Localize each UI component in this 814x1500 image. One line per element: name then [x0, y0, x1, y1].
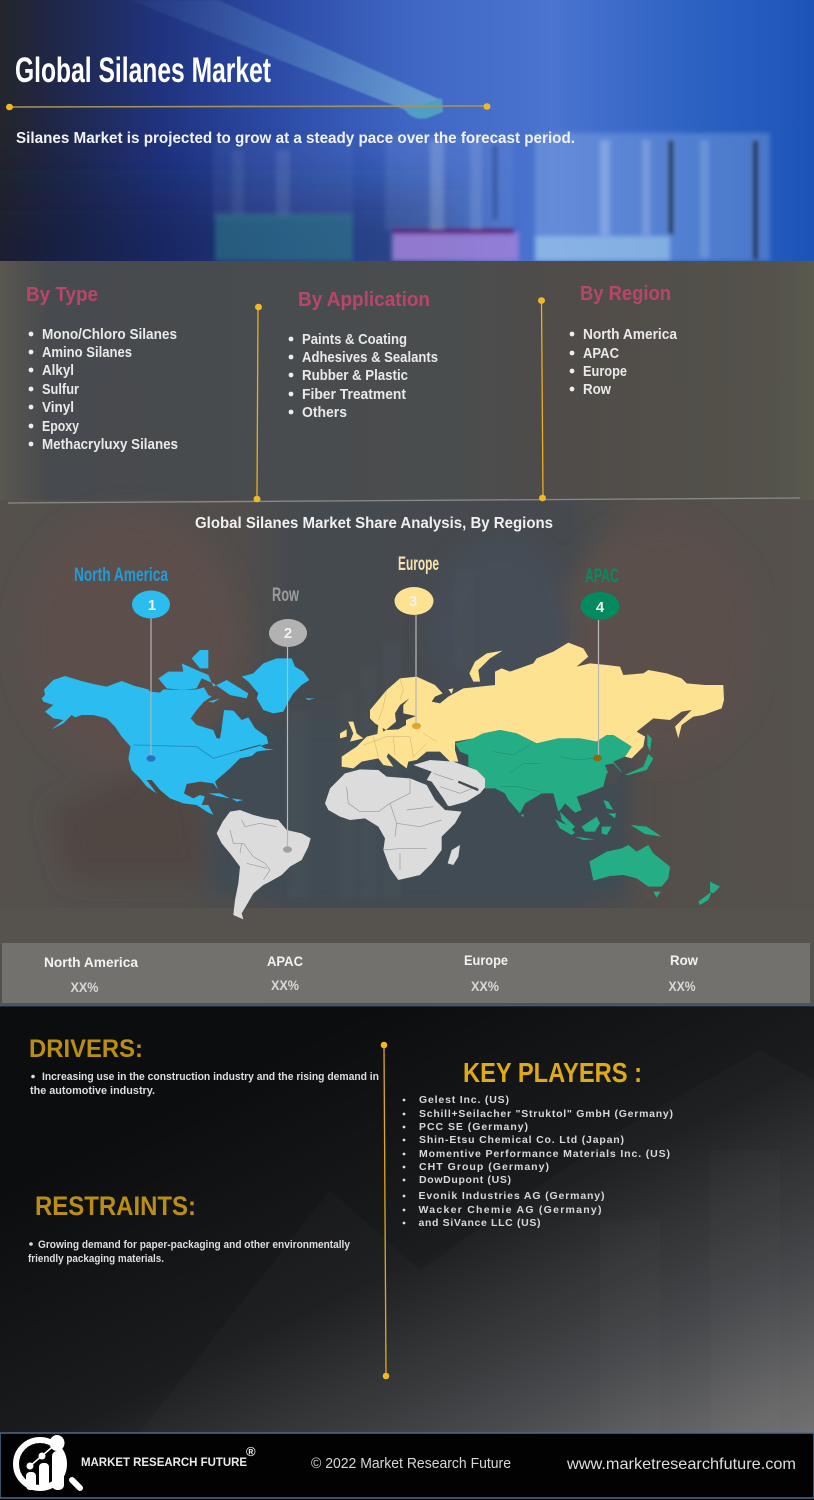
website: www.marketresearchfuture.com — [566, 1456, 796, 1473]
divider: left — [254, 304, 262, 502]
key players: PCC SE (Germany) — [419, 1121, 528, 1133]
restraints: RESTRAINTS: — [35, 1191, 196, 1221]
drivers: Increasing use in the construction industry and the rising demand in — [42, 1071, 379, 1083]
subtitle: Silanes Market is projected to grow at a steady pace over the forecast period. — [16, 130, 575, 147]
europe and russia — [340, 643, 724, 768]
decorative gray rule — [8, 498, 800, 503]
panel: drivers restraints key players — [0, 1007, 814, 1433]
registered mark: ® — [246, 1444, 256, 1459]
restraints: friendly packaging materials. — [28, 1253, 164, 1265]
key players: KEY PLAYERS : — [463, 1057, 642, 1088]
drivers: DRIVERS: — [29, 1035, 143, 1063]
table: regional share: XX% — [668, 978, 696, 994]
pin: europe — [394, 554, 439, 729]
list: types: Amino Silanes — [42, 345, 132, 361]
map: eurasia africa oceania — [325, 643, 724, 905]
restraints: Growing demand for paper-packaging and other environmentally — [38, 1239, 351, 1251]
south america — [217, 810, 311, 919]
copyright: © 2022 Market Research Future — [311, 1456, 511, 1472]
table: regional share: Europe — [464, 952, 508, 968]
yellow sea — [605, 763, 622, 785]
list: applications — [289, 332, 438, 421]
list: applications: Paints & Coating — [302, 332, 407, 348]
asia — [455, 730, 720, 905]
key players: Schill+Seilacher "Struktol" GmbH (Germany) — [419, 1108, 673, 1120]
list: types: Sulfur — [42, 382, 79, 398]
header banner — [0, 0, 814, 310]
divider: lower — [381, 1042, 389, 1379]
baltic sea — [386, 698, 416, 730]
list: applications: Fiber Treatment — [302, 387, 406, 403]
list: regions: Europe — [583, 364, 627, 380]
heading: by region: By Region — [580, 283, 671, 305]
restraints — [28, 1191, 351, 1265]
heading: by type: By Type — [26, 284, 98, 306]
brand name: MARKET RESEARCH FUTURE — [81, 1457, 247, 1469]
list: types: Epoxy — [42, 419, 79, 435]
drivers: the automotive industry. — [30, 1085, 155, 1097]
gold rule under title — [6, 103, 490, 110]
panel: segmentation background — [0, 261, 814, 504]
list: applications: Others — [302, 405, 347, 421]
pin: row: 2 — [284, 625, 292, 642]
key players: Momentive Performance Materials Inc. (US) — [419, 1148, 670, 1160]
pin: north america: North America — [74, 565, 168, 586]
key players: Gelest Inc. (US) — [419, 1094, 509, 1106]
pin: north america: 1 — [148, 597, 156, 614]
key players: Wacker Chemie AG (Germany) — [418, 1204, 602, 1216]
footer — [0, 1433, 814, 1498]
map: north and south america — [42, 650, 315, 919]
world map — [42, 643, 724, 919]
drivers — [29, 1035, 379, 1097]
list: applications: Adhesives & Sealants — [302, 350, 438, 366]
heading: by application: By Application — [298, 289, 430, 311]
table: regional share: North America — [44, 954, 138, 970]
panel: by application — [289, 289, 438, 421]
key players: CHT Group (Germany) — [419, 1161, 549, 1173]
list: types: Vinyl — [42, 400, 74, 416]
pin: row: Row — [272, 585, 299, 606]
list: types: Mono/Chloro Silanes — [42, 327, 177, 343]
red sea and persian gulf — [428, 782, 478, 810]
map heading: Global Silanes Market Share Analysis, By Regions — [195, 515, 553, 532]
table: regional share: Row — [670, 952, 698, 968]
divider: right — [538, 297, 546, 501]
panel: map background — [0, 500, 814, 1006]
key players: DowDupont (US) — [419, 1174, 511, 1186]
pin: apac: 4 — [596, 599, 605, 616]
panel: by type — [26, 284, 178, 453]
key players: Shin-Etsu Chemical Co. Ltd (Japan) — [419, 1134, 624, 1146]
pin: europe: 3 — [409, 593, 417, 610]
list: regions — [570, 327, 678, 398]
test tubes — [213, 133, 770, 261]
table: regional share: XX% — [471, 978, 499, 994]
icon: magnifier logo — [16, 1435, 80, 1490]
north america — [42, 650, 315, 815]
table: regional share: APAC — [267, 953, 303, 969]
panel: by region — [570, 283, 678, 398]
list: regions: APAC — [583, 346, 619, 362]
list: types — [29, 327, 178, 453]
pin: europe: Europe — [398, 554, 439, 575]
list: applications: Rubber & Plastic — [302, 368, 408, 384]
key players: Evonik Industries AG (Germany) — [418, 1190, 604, 1202]
list: regions: North America — [583, 327, 678, 343]
list: types: Methacryluxy Silanes — [42, 437, 178, 453]
title: Global Silanes Market — [15, 51, 271, 90]
pin: apac — [580, 566, 620, 761]
pipette — [130, 0, 443, 119]
table: regional share: XX% — [271, 977, 299, 993]
pin: row — [269, 585, 307, 853]
key players — [403, 1057, 673, 1229]
table: regional share — [0, 943, 814, 1005]
list: types: Alkyl — [42, 363, 74, 379]
pin: north america — [74, 565, 170, 762]
africa and middle east — [325, 760, 485, 880]
list: regions: Row — [583, 382, 612, 398]
key players: and SiVance LLC (US) — [418, 1217, 540, 1229]
pin: apac: APAC — [585, 566, 619, 587]
table: regional share: XX% — [70, 979, 99, 995]
